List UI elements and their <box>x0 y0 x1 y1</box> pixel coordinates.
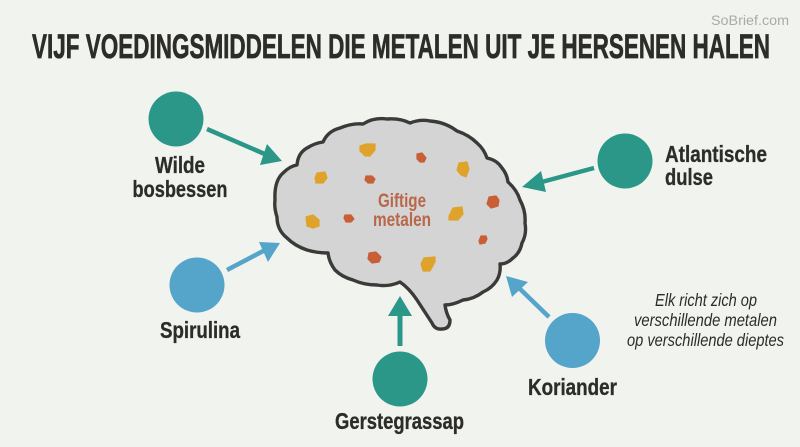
circle <box>598 134 652 188</box>
circle <box>170 258 224 312</box>
label: Koriander <box>528 374 617 400</box>
label: dulse <box>665 164 713 190</box>
brain outline <box>275 119 526 329</box>
arrow <box>227 242 280 270</box>
brain label: Giftige <box>378 191 426 212</box>
arrow <box>522 168 594 192</box>
food: Atlantische dulse <box>522 134 767 192</box>
circle <box>545 313 600 368</box>
brain label <box>373 191 431 231</box>
label <box>132 152 228 202</box>
label: Spirulina <box>160 317 240 343</box>
circle <box>148 92 204 146</box>
food: Wilde bosbessen <box>132 92 282 202</box>
label: Atlantische <box>665 141 767 167</box>
metal particles <box>306 144 499 271</box>
label: Gerstegrassap <box>335 408 464 434</box>
watermark: SoBrief.com <box>711 13 789 28</box>
arrow <box>388 296 412 346</box>
food: Koriander <box>506 276 617 400</box>
label <box>665 141 767 190</box>
brain illustration <box>275 119 526 329</box>
label: bosbessen <box>132 176 228 202</box>
circle <box>372 352 428 406</box>
arrow <box>207 129 282 165</box>
note <box>627 290 784 350</box>
note: Elk richt zich op <box>655 290 757 310</box>
food: Spirulina <box>160 242 280 343</box>
note: verschillende metalen <box>634 310 777 330</box>
food: Gerstegrassap <box>335 296 464 434</box>
label: Wilde <box>155 152 205 178</box>
brain label: metalen <box>373 210 431 231</box>
arrow <box>506 276 549 317</box>
